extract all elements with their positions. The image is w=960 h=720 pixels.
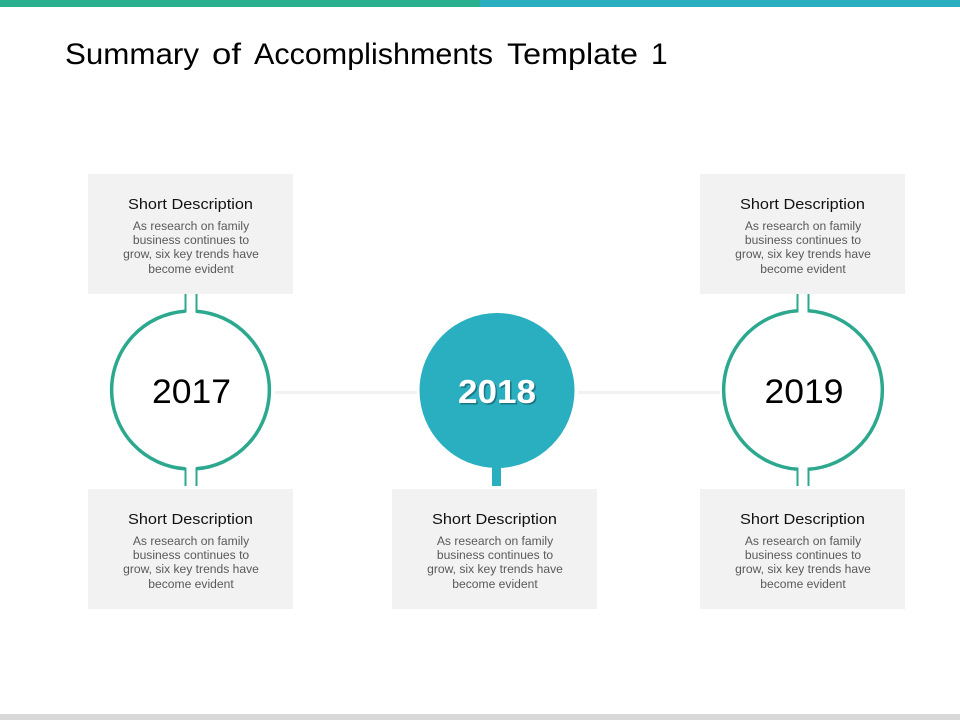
panel: 2019 bottom description: Short Description — [740, 511, 865, 528]
panel: 2017 top description: Short Description — [128, 196, 253, 213]
panel: 2019 top description: As research on family — [745, 219, 862, 233]
panel: 2018 bottom description: As research on family — [437, 534, 554, 548]
panel: 2019 top description: become evident — [760, 262, 846, 276]
panel: 2019 top description: Short Description — [740, 196, 865, 213]
title — [65, 38, 668, 71]
year: 2019: 2019 — [764, 373, 844, 411]
year: 2018: 2018 — [458, 373, 536, 410]
panel: 2017 top description: As research on family — [133, 219, 250, 233]
panel: 2019 bottom description: business continues to — [745, 548, 861, 562]
connector line: 2018 to 2019 — [578, 391, 720, 394]
ring: 2019 — [724, 294, 882, 486]
panel: 2017 bottom description: business continues to — [133, 548, 249, 562]
title: of — [212, 38, 242, 71]
panel: 2017 bottom description: become evident — [148, 577, 234, 591]
panel: 2017 top description — [88, 174, 293, 294]
panel: 2018 bottom description: grow, six key trends have — [427, 562, 563, 576]
panel: 2017 bottom description: Short Description — [128, 511, 253, 528]
panel: 2018 bottom description: Short Description — [432, 511, 557, 528]
title: 1 — [651, 38, 668, 71]
panel: 2019 bottom description — [700, 489, 905, 609]
title: Template — [507, 38, 638, 71]
panel: 2018 bottom description: business continues to — [437, 548, 553, 562]
panel: 2019 bottom description: grow, six key trends have — [735, 562, 871, 576]
panel: 2019 bottom description: As research on family — [745, 534, 862, 548]
panel: 2017 bottom description: grow, six key trends have — [123, 562, 259, 576]
title: Accomplishments — [254, 38, 493, 71]
year: 2017: 2017 — [152, 373, 231, 411]
circle: 2018 — [420, 313, 574, 486]
ring: 2017 — [112, 294, 269, 486]
bottom bar — [0, 714, 960, 720]
panel: 2018 bottom description — [392, 489, 597, 609]
panel: 2019 bottom description: become evident — [760, 577, 846, 591]
top accent bar — [0, 0, 960, 7]
panel: 2018 bottom description: become evident — [452, 577, 538, 591]
panel: 2019 top description: grow, six key trends have — [735, 247, 871, 261]
panel: 2017 bottom description: As research on family — [133, 534, 250, 548]
connector line: 2017 to 2018 — [275, 391, 417, 394]
panel: 2019 top description: business continues to — [745, 233, 861, 247]
panel: 2017 bottom description — [88, 489, 293, 609]
panel: 2017 top description: grow, six key trends have — [123, 247, 259, 261]
title: Summary — [65, 38, 199, 71]
panel: 2017 top description: business continues to — [133, 233, 249, 247]
panel: 2019 top description — [700, 174, 905, 294]
circle: 2018: 2018 — [460, 374, 538, 412]
panel: 2017 top description: become evident — [148, 262, 234, 276]
